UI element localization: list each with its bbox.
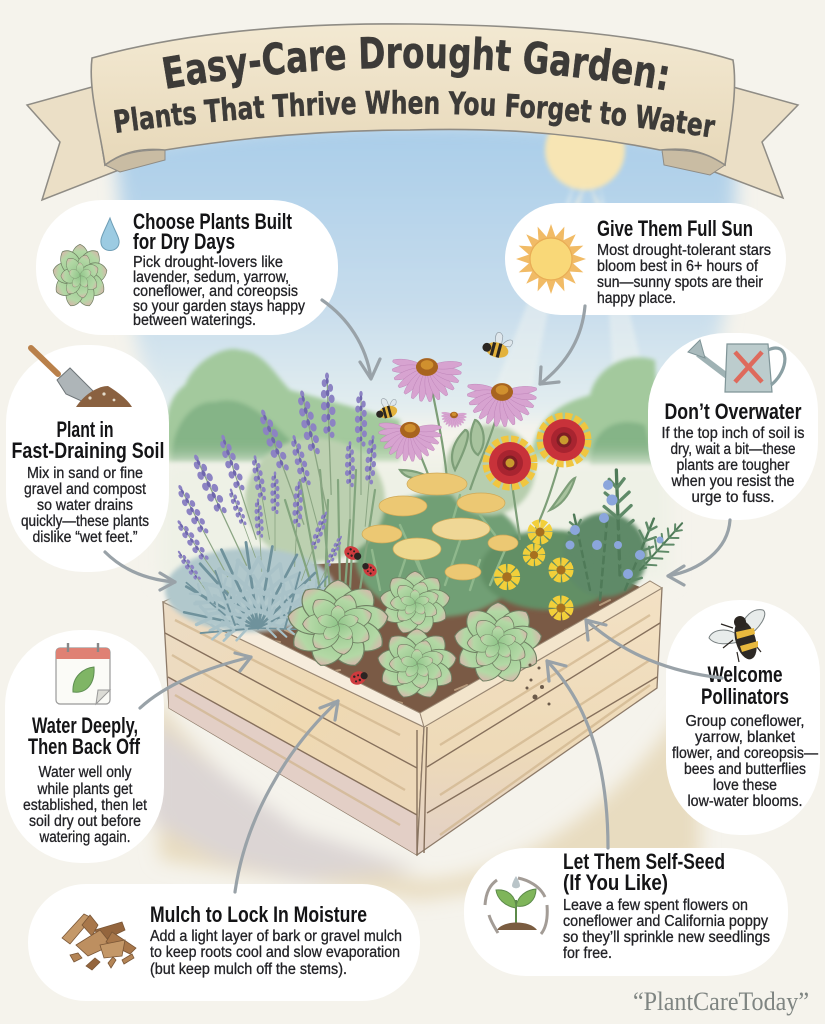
garden plants: [165, 357, 689, 706]
icon: calendar with leaf: [56, 643, 110, 704]
panel: full sun: [505, 203, 786, 315]
panel: fast-draining soil: [6, 345, 169, 572]
banner: [26, 23, 800, 202]
body text: lavender, sedum, yarrow,: [133, 269, 289, 286]
arrow: self-seed to bed: [547, 661, 608, 848]
body text: sun—sunny spots are their: [597, 274, 763, 291]
soil chips: [205, 600, 610, 703]
body text: to keep roots cool and slow evaporation: [150, 944, 400, 961]
arrow: water deeply to bed: [140, 653, 251, 708]
icon: succulent: [52, 244, 108, 309]
right rim: [420, 581, 662, 727]
body text: so water drains: [37, 497, 133, 514]
heading: Pollinators: [701, 684, 789, 709]
background trees right: [530, 357, 660, 465]
yarrow: [362, 473, 518, 580]
banner left tail: [27, 87, 165, 200]
body text: so they’ll sprinkle new seedlings: [563, 929, 770, 946]
bee flying top: [481, 329, 514, 361]
flower stems and leaves: [400, 370, 575, 540]
blanket flowers: [486, 416, 588, 487]
icon: water drop: [101, 218, 119, 250]
heading: Then Back Off: [28, 734, 141, 759]
body text: gravel and compost: [24, 481, 147, 498]
banner fold shadows: [105, 150, 725, 175]
heading: Give Them Full Sun: [597, 216, 753, 241]
arrow: pollinators to bed: [586, 620, 722, 678]
icon: trowel and soil: [31, 348, 132, 407]
body text: Water well only: [38, 764, 132, 781]
body text: between waterings.: [133, 312, 256, 329]
panel: mulch: [28, 884, 420, 1001]
body text: Mix in sand or fine: [27, 465, 143, 482]
heading: (If You Like): [563, 870, 668, 895]
brand credit: “PlantCareToday”: [633, 987, 809, 1016]
coneflowers: [378, 357, 537, 462]
arrow: choose plants to lavender: [322, 300, 380, 379]
body text: (but keep mulch off the stems).: [150, 961, 347, 978]
scattered seeds: [526, 664, 550, 706]
banner body: [91, 24, 735, 165]
body text: bloom best in 6+ hours of: [597, 258, 759, 275]
heading: Choose Plants Built: [133, 209, 293, 234]
icon: wood chips: [62, 914, 136, 970]
sun in the sky: [530, 110, 640, 285]
pale wash behind the plants: [160, 460, 670, 580]
panel: welcome pollinators: [666, 600, 820, 835]
arrow: overwater to rosemary: [668, 520, 730, 585]
title line 1 curve: [165, 68, 664, 90]
body text: Group coneflower,: [686, 713, 804, 730]
body text: happy place.: [597, 290, 676, 307]
icon: bumblebee: [709, 610, 765, 662]
title line 1: Easy-Care Drought Garden:: [162, 36, 668, 90]
panel: don't overwater: [648, 333, 818, 520]
panel: self-seed: [464, 848, 788, 976]
icon: sun: [516, 224, 586, 294]
panel: water deeply: [5, 630, 164, 863]
body text: plants are tougher: [676, 457, 790, 474]
banner right tail: [662, 87, 798, 198]
body text: watering again.: [39, 829, 130, 846]
icon: seedling cycle: [485, 876, 547, 934]
body text: bees and butterflies: [684, 761, 806, 778]
body text: so your garden stays happy: [133, 298, 305, 315]
arrow: mulch to bed: [235, 701, 338, 892]
panel: choose plants: [36, 200, 338, 335]
icon: watering can: [688, 340, 785, 392]
title line 2 curve: [115, 113, 708, 137]
heading: Fast-Draining Soil: [12, 438, 164, 463]
ladybugs: [342, 543, 379, 687]
body text: coneflower and California poppy: [563, 913, 768, 930]
title line 2: Plants That Thrive When You Forget to Water: [114, 90, 716, 138]
left bed bottom plank tint: [168, 677, 417, 855]
body text: when you resist the: [671, 473, 794, 490]
body text: established, then let: [23, 797, 148, 814]
body text: If the top inch of soil is: [662, 425, 805, 442]
heading: Plant in: [56, 417, 114, 442]
arrow: sun to coneflower: [540, 306, 585, 384]
body text: Add a light layer of bark or gravel mulch: [150, 928, 402, 945]
rosemary: [563, 470, 689, 601]
body text: Pick drought-lovers like: [133, 254, 283, 271]
heading: Welcome: [708, 662, 782, 687]
body text: for free.: [563, 945, 612, 962]
body text: Most drought-tolerant stars: [597, 242, 771, 259]
body text: low-water blooms.: [688, 793, 802, 810]
body text: Leave a few spent flowers on: [563, 897, 748, 914]
right bed face: [417, 588, 662, 855]
body text: urge to fuss.: [692, 489, 774, 506]
body text: soil dry out before: [29, 813, 141, 830]
succulents: [285, 571, 544, 701]
yarrow foliage blades: [372, 495, 505, 590]
raised garden bed: [163, 555, 662, 855]
heading: Let Them Self-Seed: [563, 849, 725, 874]
bee flying near lavender: [373, 395, 400, 421]
left rim: [163, 584, 424, 727]
coreopsis: [498, 524, 570, 616]
silver foliage: [179, 540, 334, 643]
heading: Mulch to Lock In Moisture: [150, 902, 367, 927]
lavender: [174, 372, 379, 608]
plank lines: [165, 623, 660, 855]
arrow: soil to bed: [105, 552, 175, 590]
lavender foliage blades: [285, 470, 375, 590]
heading: Water Deeply,: [32, 713, 138, 738]
background trees left: [165, 349, 400, 462]
left bed face: [163, 602, 424, 855]
body text: love these: [713, 777, 777, 794]
foliage mass: [165, 425, 647, 632]
body text: quickly—these plants: [21, 513, 149, 530]
soil back fill: [187, 555, 640, 713]
body text: dry, wait a bit—these: [670, 441, 796, 458]
body text: while plants get: [37, 781, 133, 798]
body text: coneflower, and coreopsis: [133, 283, 298, 300]
ground wash: [150, 680, 700, 900]
body text: dislike “wet feet.”: [32, 529, 138, 546]
watercolor sky: [115, 122, 736, 420]
heading: for Dry Days: [133, 229, 235, 254]
body text: yarrow, blanket: [695, 729, 796, 746]
